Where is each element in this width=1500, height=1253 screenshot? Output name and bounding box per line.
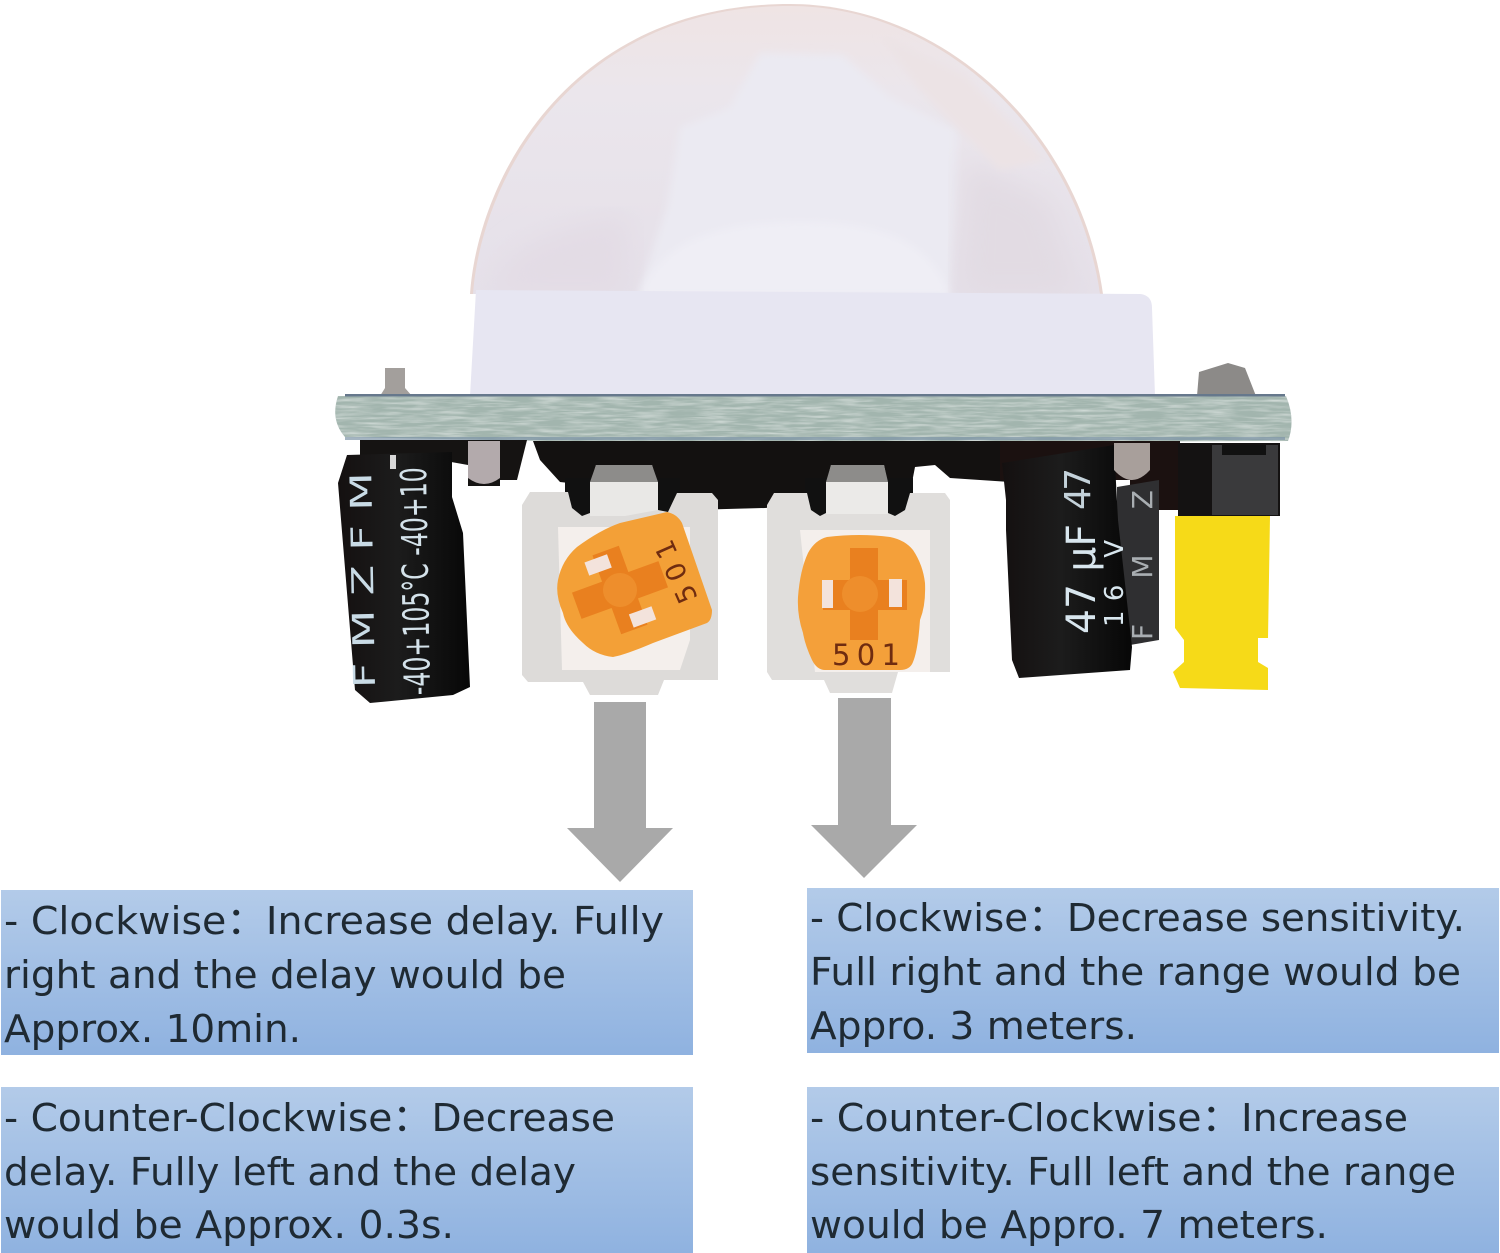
right trimmer potentiometer <box>767 465 950 693</box>
arrow: left trimmer to delay notes <box>567 702 673 882</box>
callout: counter-clockwise delay <box>1 1087 693 1253</box>
arrow: right trimmer to sensitivity notes <box>811 698 917 878</box>
callout: counter-clockwise sensitivity <box>807 1087 1499 1253</box>
left trimmer potentiometer <box>522 465 718 695</box>
left pin <box>380 368 412 396</box>
callout: counter-clockwise delay: - Counter-Clockwise：Decrease <box>4 1096 615 1140</box>
callout: counter-clockwise delay: delay. Fully left and the delay <box>4 1150 576 1194</box>
orange dial: 501 <box>649 535 704 608</box>
capacitor behind right: FMZ <box>1126 490 1159 640</box>
lens collar <box>470 290 1155 396</box>
callout: clockwise delay <box>1 890 693 1055</box>
indicator lamp right <box>1114 443 1150 480</box>
callout: clockwise sensitivity <box>807 888 1499 1053</box>
callout: clockwise sensitivity: Full right and the range would be <box>810 950 1461 994</box>
capacitor left <box>338 452 470 703</box>
right pin <box>1197 363 1256 396</box>
orange dial <box>798 535 925 672</box>
callout: counter-clockwise sensitivity: - Counter-Clockwise：Increase <box>810 1096 1408 1140</box>
capacitor right: 16 V <box>1100 540 1130 627</box>
callout: clockwise sensitivity: Appro. 3 meters. <box>810 1004 1137 1048</box>
orange dial <box>557 512 712 657</box>
capacitor left: F M Z F M <box>344 472 383 688</box>
capacitor left: -40+105°C -40+10 <box>394 467 439 696</box>
callout: counter-clockwise sensitivity: sensitivity. Full left and the range <box>810 1150 1456 1194</box>
underside dark components <box>533 441 1010 510</box>
circuit board <box>330 394 1300 444</box>
callout: counter-clockwise delay: would be Approx. 0.3s. <box>4 1203 454 1247</box>
indicator lamp left <box>468 441 500 484</box>
capacitor right: 47 µF <box>1059 524 1105 634</box>
yellow jumper <box>1173 516 1270 690</box>
capacitor right <box>1002 445 1132 678</box>
sensor module photo <box>330 4 1300 703</box>
callout: clockwise delay: right and the delay would be <box>4 953 566 997</box>
callout: counter-clockwise sensitivity: would be Appro. 7 meters. <box>810 1203 1328 1247</box>
callout: clockwise delay: Approx. 10min. <box>4 1007 301 1051</box>
callout: clockwise delay: - Clockwise：Increase delay. Fully <box>4 899 664 943</box>
callout: clockwise sensitivity: - Clockwise：Decrease sensitivity. <box>810 896 1465 940</box>
dark backing behind right capacitor <box>1000 441 1180 510</box>
jumper header <box>1173 443 1280 690</box>
capacitor right: 47 <box>1058 468 1099 510</box>
orange dial: 501 <box>832 638 900 672</box>
icon: PIR lens dome <box>470 4 1103 296</box>
